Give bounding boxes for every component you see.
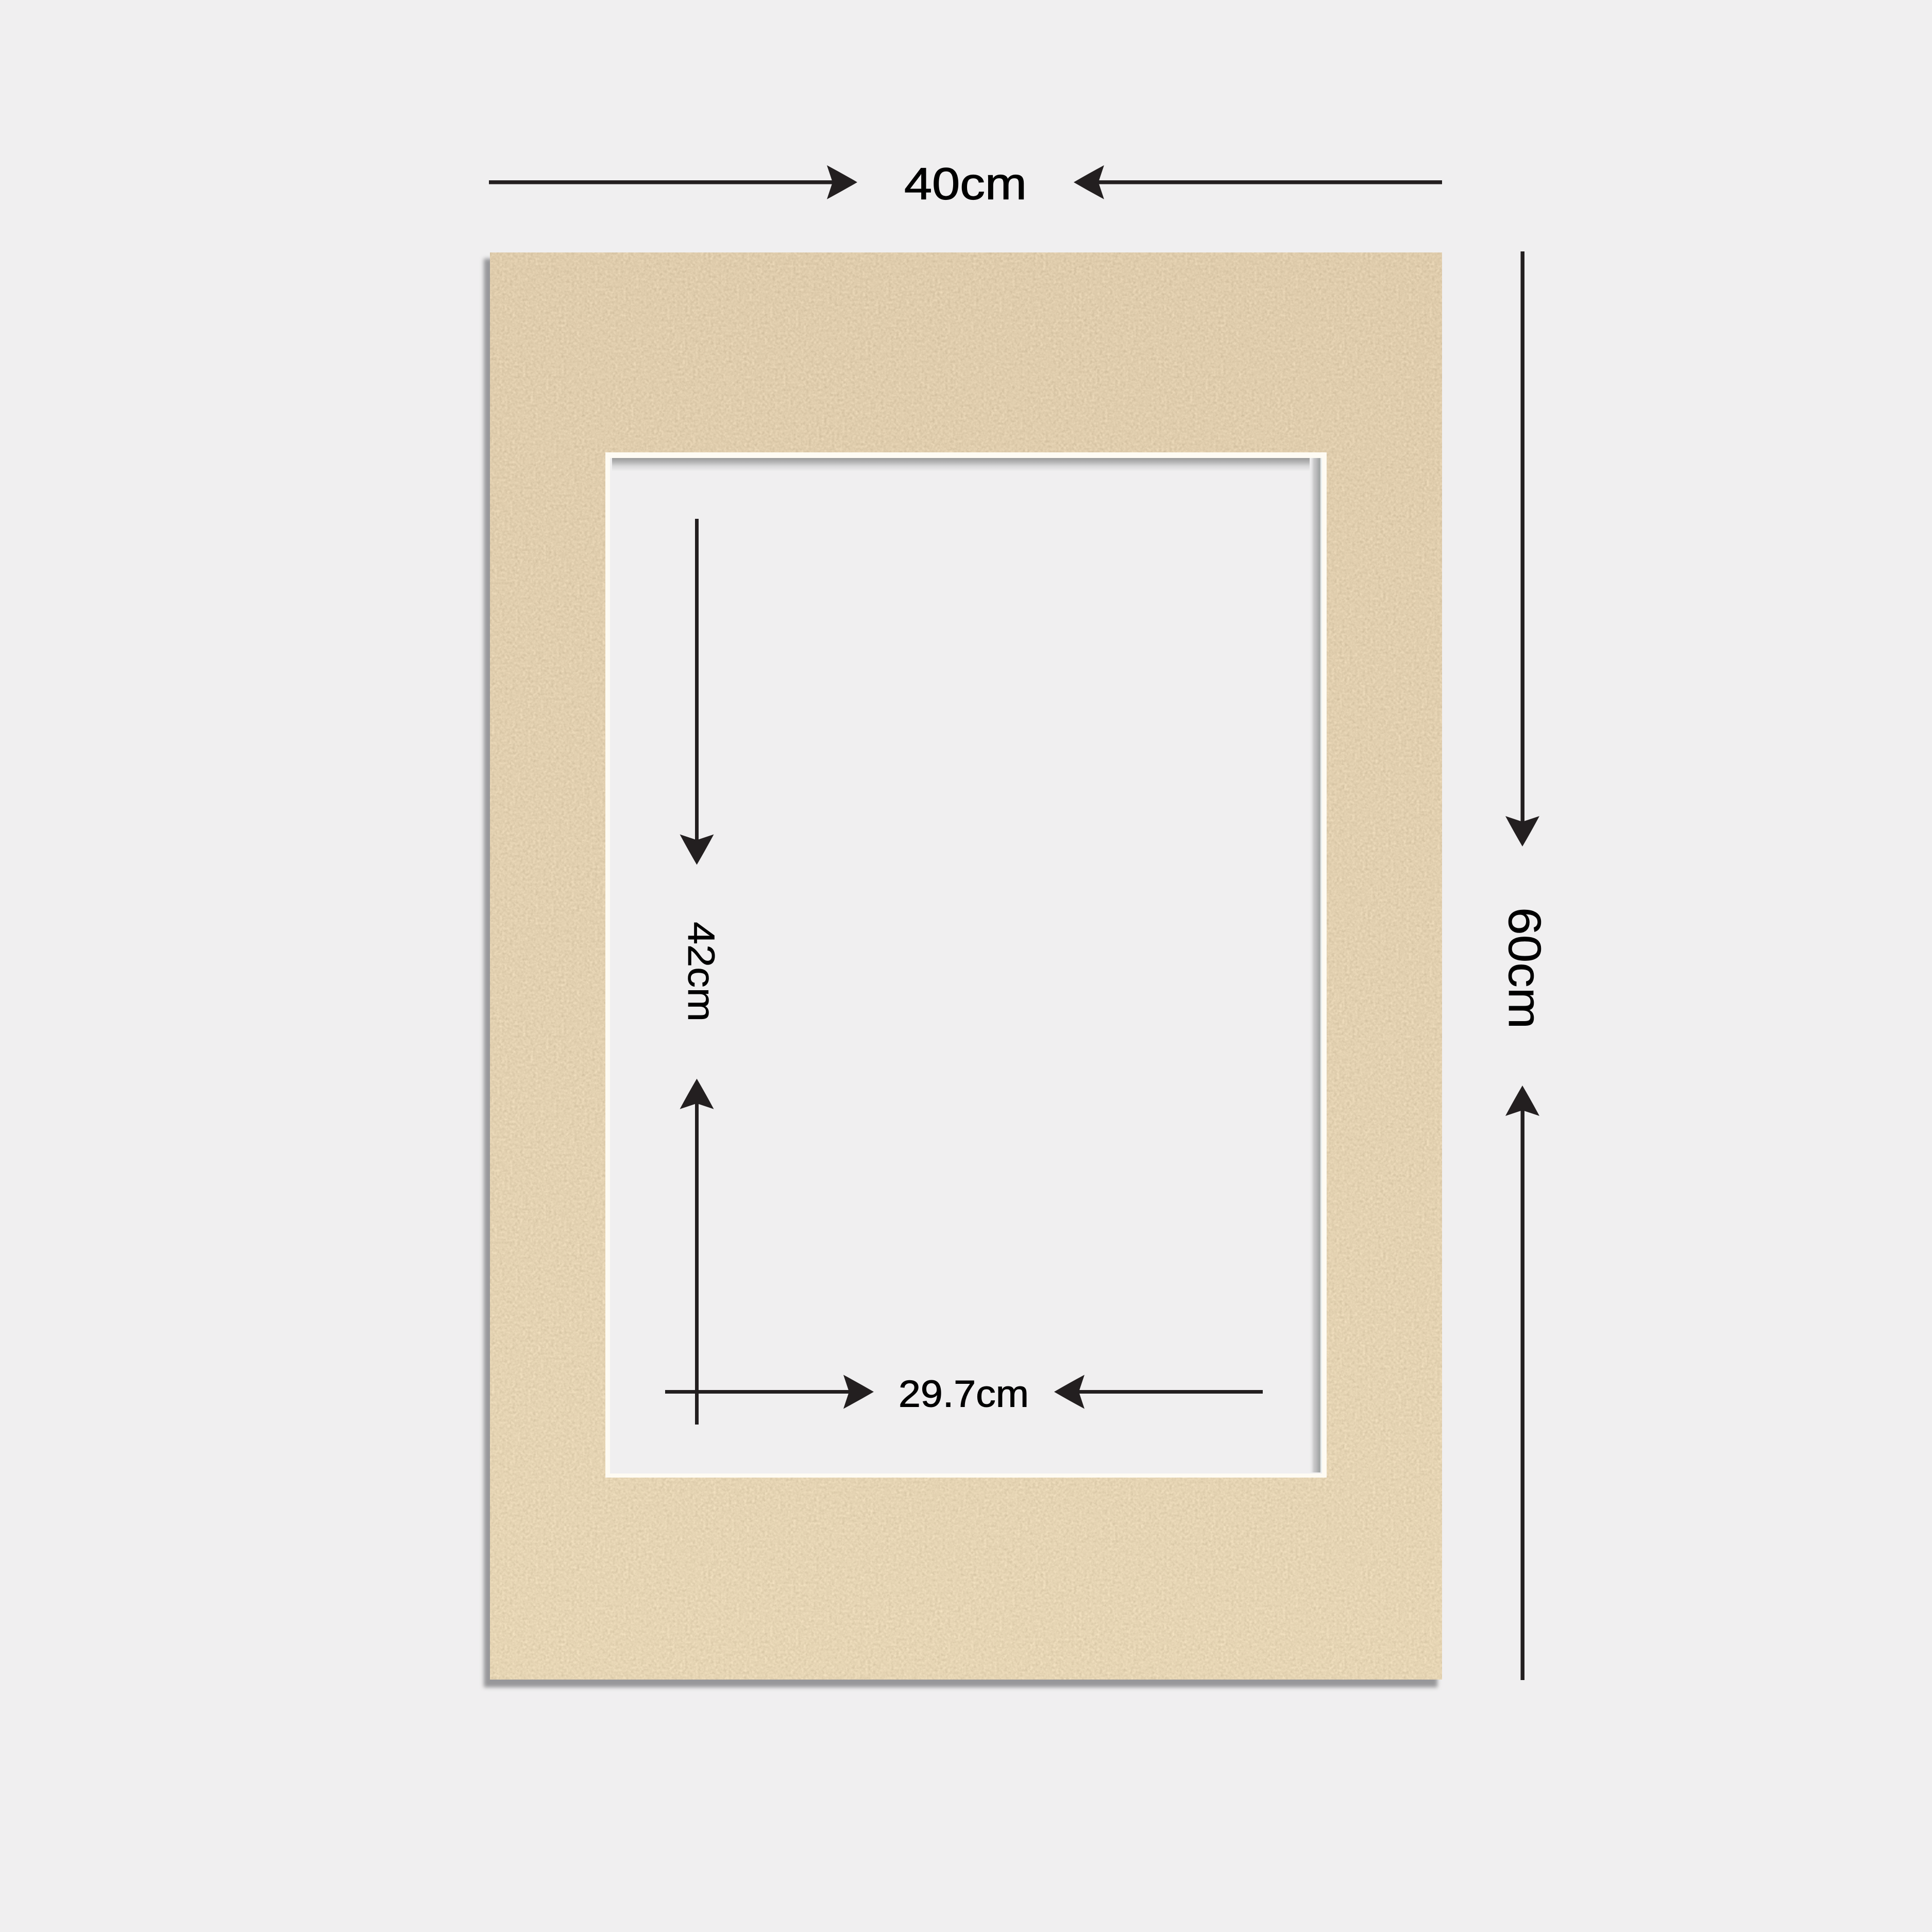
- cream bevel around aperture: [605, 452, 1327, 1478]
- arrow: top, pointing down: [1505, 251, 1539, 846]
- aperture window: [605, 452, 1327, 1478]
- label: 42cm: 42cm: [680, 922, 722, 1022]
- dimension: outer width 40cm: [489, 159, 1442, 209]
- label: 29.7cm: 29.7cm: [899, 1374, 1029, 1415]
- arrow: right, pointing left: [1054, 1375, 1263, 1409]
- arrow: bottom, pointing up: [1505, 1086, 1539, 1680]
- dimension: aperture height 42cm: [680, 519, 722, 1425]
- arrow: left, pointing right: [489, 165, 857, 199]
- panel: mount board: [484, 252, 1442, 1687]
- arrow: top, pointing down: [680, 519, 714, 865]
- label: 60cm: 60cm: [1499, 907, 1551, 1029]
- dimension: aperture width 29.7cm: [665, 1374, 1263, 1415]
- tan board with aperture cut out: [490, 252, 1442, 1680]
- label: 40cm: 40cm: [904, 159, 1027, 209]
- arrow: left, pointing right: [665, 1375, 874, 1409]
- board drop shadow: [484, 259, 1437, 1687]
- arrow: right, pointing left: [1074, 165, 1442, 199]
- arrow: bottom, pointing up: [680, 1079, 714, 1425]
- dimension: outer height 60cm: [1499, 251, 1551, 1680]
